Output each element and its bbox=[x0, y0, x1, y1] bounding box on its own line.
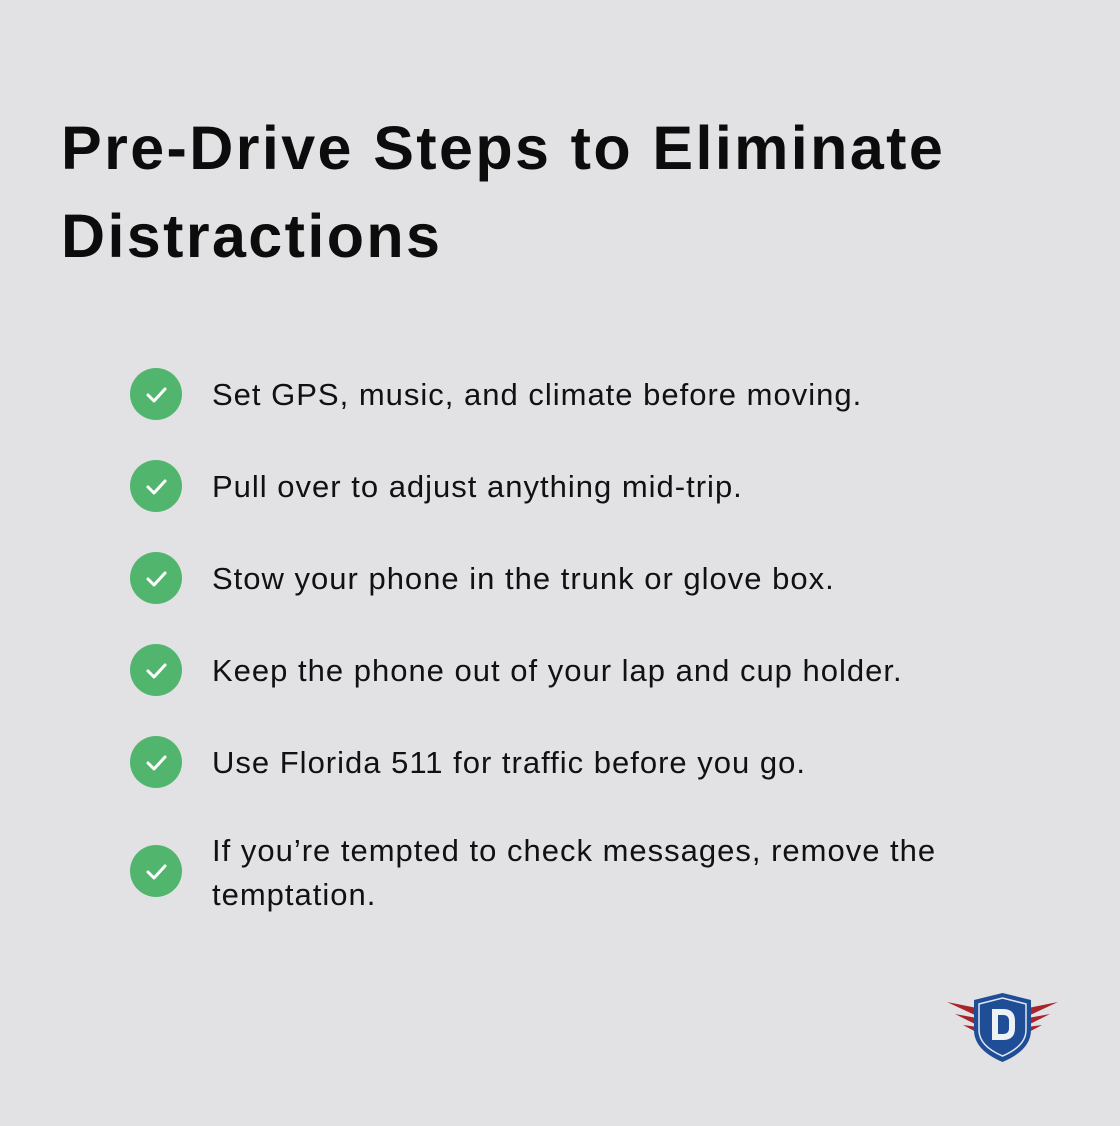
item 1: Set GPS, music, and climate before moving. bbox=[212, 377, 862, 412]
title: Pre-Drive Steps to Eliminate bbox=[61, 114, 945, 182]
item 5 bbox=[130, 736, 806, 788]
item 2: Pull over to adjust anything mid-trip. bbox=[212, 469, 743, 504]
item 6: If you’re tempted to check messages, remove the bbox=[212, 833, 936, 868]
title bbox=[61, 114, 945, 270]
item 6: temptation. bbox=[212, 877, 376, 912]
item 3 bbox=[130, 552, 835, 604]
title: Distractions bbox=[61, 202, 442, 270]
item 2 bbox=[130, 460, 743, 512]
item 6 bbox=[130, 833, 936, 912]
item 5: Use Florida 511 for traffic before you go. bbox=[212, 745, 806, 780]
item 1 bbox=[130, 368, 862, 420]
item 4: Keep the phone out of your lap and cup holder. bbox=[212, 653, 903, 688]
item 3: Stow your phone in the trunk or glove box. bbox=[212, 561, 835, 596]
item 4 bbox=[130, 644, 903, 696]
logo bbox=[947, 993, 1058, 1062]
